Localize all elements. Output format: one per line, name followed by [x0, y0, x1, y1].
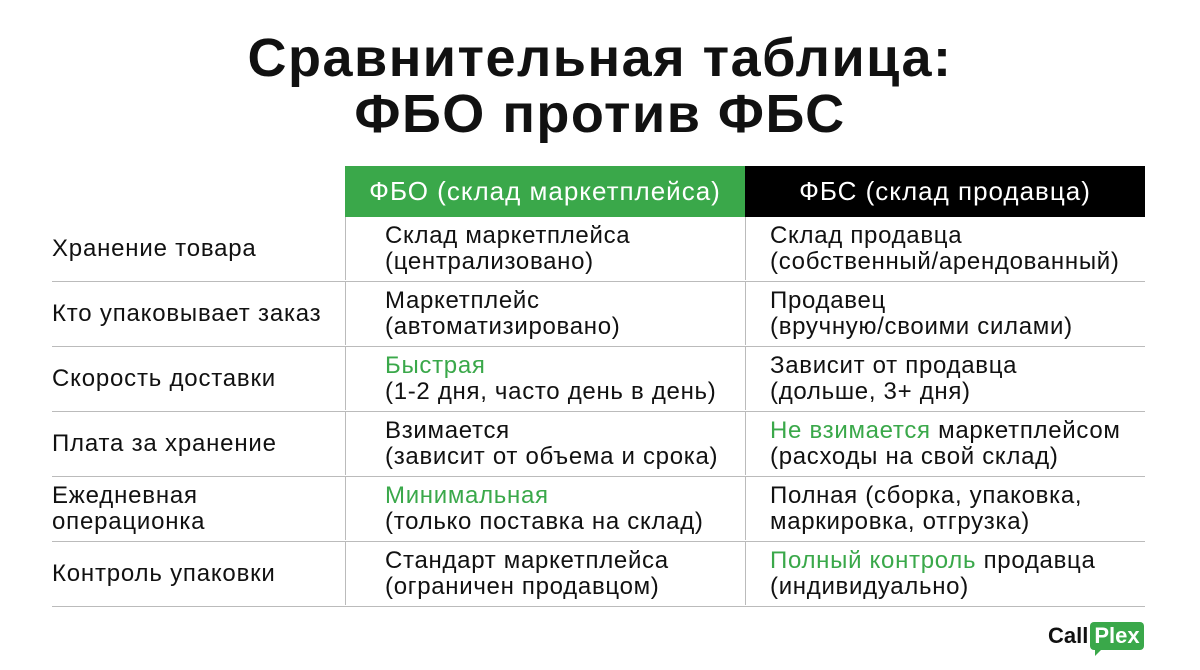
- row: packing: Кто упаковывает заказ: [52, 300, 321, 326]
- logo: Plex: [1094, 623, 1140, 648]
- row: operations: Ежедневная: [52, 482, 198, 508]
- row: operations: маркировка, отгрузка): [770, 508, 1030, 534]
- row: packaging control: [52, 542, 1145, 607]
- row: storage fee: Плата за хранение: [52, 430, 277, 456]
- row: speed: Скорость доставки: [52, 364, 276, 392]
- row: storage fee: (расходы на свой склад): [770, 442, 1059, 470]
- row: operations: Полная (сборка, упаковка,: [770, 482, 1082, 508]
- table: [52, 166, 1145, 607]
- row: packing: (автоматизировано): [385, 312, 620, 340]
- row: speed: Зависит от продавца: [770, 352, 1017, 378]
- row: storage: Склад маркетплейса: [385, 222, 630, 248]
- row: storage fee: Не взимается маркетплейсом: [770, 416, 1121, 444]
- row: packing: Продавец: [770, 286, 886, 314]
- row: packaging control: Полный контроль продавца: [770, 546, 1096, 574]
- row: speed: Быстрая: [385, 352, 486, 378]
- header: FBS: [745, 166, 1145, 217]
- row: storage: Хранение товара: [52, 234, 257, 262]
- header: FBS: ФБС (склад продавца): [799, 176, 1091, 206]
- row: speed: (дольше, 3+ дня): [770, 378, 971, 404]
- title: Сравнительная таблица:: [247, 28, 953, 88]
- row: storage fee: [52, 412, 1145, 477]
- row: packaging control: Контроль упаковки: [52, 560, 276, 586]
- row: speed: (1-2 дня, часто день в день): [385, 378, 716, 404]
- row: packing: [52, 282, 1145, 347]
- logo: Call: [1048, 623, 1088, 648]
- row: storage fee: (зависит от объема и срока): [385, 442, 718, 470]
- row: operations: Минимальная: [385, 482, 549, 508]
- row: packaging control: (ограничен продавцом): [385, 572, 660, 600]
- row: operations: [52, 477, 1145, 542]
- row: storage: Склад продавца: [770, 222, 962, 248]
- row: storage: [52, 217, 1145, 282]
- row: storage fee: Взимается: [385, 416, 510, 444]
- row: speed: [52, 347, 1145, 412]
- header: FBO: ФБО (склад маркетплейса): [369, 176, 721, 206]
- row: storage: (собственный/арендованный): [770, 248, 1120, 274]
- row: packaging control: Стандарт маркетплейса: [385, 546, 669, 574]
- title: [247, 28, 953, 144]
- row: packing: (вручную/своими силами): [770, 312, 1073, 340]
- title: ФБО против ФБС: [354, 84, 846, 144]
- logo: [1048, 622, 1144, 656]
- row: packing: Маркетплейс: [385, 286, 540, 314]
- row: operations: (только поставка на склад): [385, 508, 704, 534]
- row: packaging control: (индивидуально): [770, 572, 969, 600]
- row: operations: операционка: [52, 508, 205, 534]
- row: storage: (централизовано): [385, 248, 594, 274]
- header: FBO: [345, 166, 745, 217]
